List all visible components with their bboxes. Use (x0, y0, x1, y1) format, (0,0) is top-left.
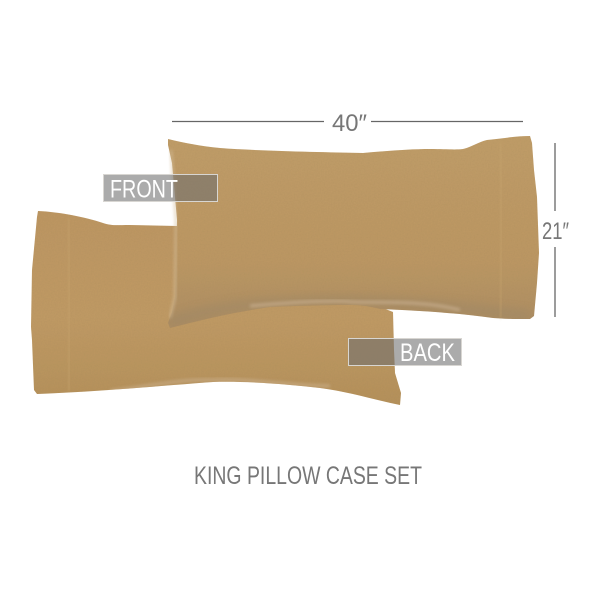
title: KING PILLOW CASE SET (194, 462, 422, 490)
front pillow (168, 136, 539, 328)
front pillow lower shadow (183, 298, 522, 317)
back pillow bottom fold highlight (110, 380, 330, 391)
label: front: FRONT (110, 176, 178, 204)
front pillow bottom fold highlight (250, 301, 460, 310)
front pillow hem seam (500, 142, 502, 318)
width dimension: 40 inches: 40″ (332, 110, 367, 137)
front pillow left edge highlight (170, 150, 176, 318)
label: back: BACK (400, 339, 455, 367)
back pillow hem seam (68, 218, 70, 391)
label: back (348, 338, 462, 367)
height dimension: 21 inches: 21″ (542, 218, 569, 245)
back pillow (31, 211, 401, 405)
